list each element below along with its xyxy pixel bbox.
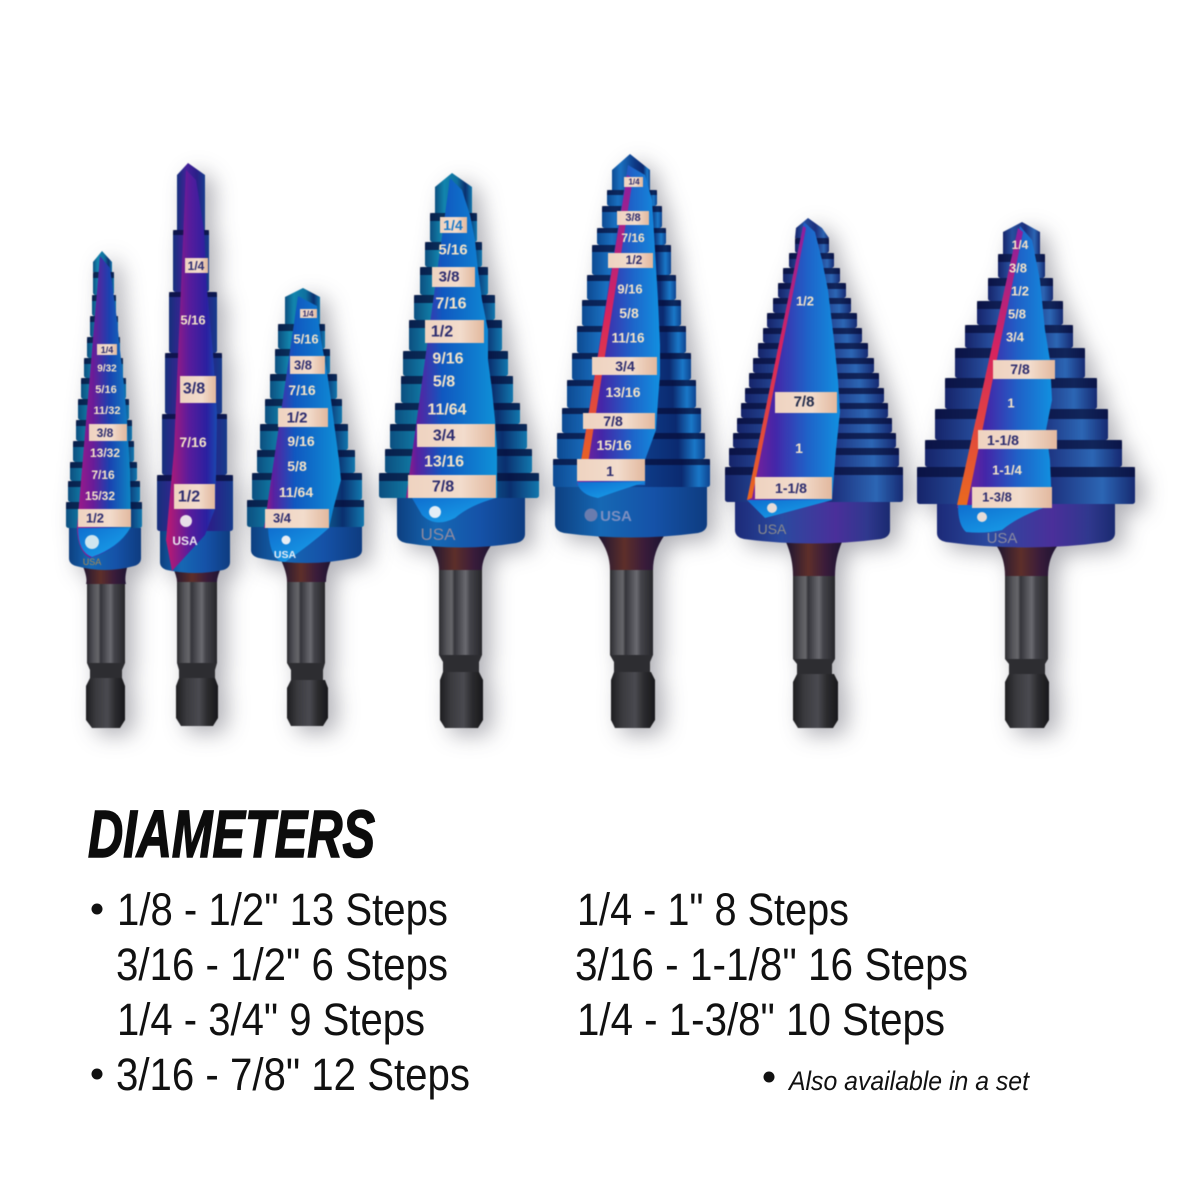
bullet (764, 1072, 774, 1082)
size markings (265, 309, 329, 561)
size markings: 7/16 (621, 231, 645, 245)
flute (406, 178, 497, 522)
size markings (408, 217, 496, 544)
size markings (577, 177, 657, 525)
bullet (92, 904, 102, 914)
size markings: 11/64 (279, 484, 313, 500)
diameters list: left column (92, 884, 470, 1100)
shank (598, 536, 664, 728)
shank (82, 564, 128, 728)
size markings: 3/8 (439, 268, 459, 286)
size markings: 3/4 (615, 358, 635, 374)
drill bit 2: 3/16 - 1/2 inch (157, 163, 233, 726)
shank (280, 558, 332, 726)
size markings: 1/2 (287, 410, 307, 426)
size markings: 1-3/8 (982, 490, 1012, 504)
size markings (972, 238, 1057, 547)
size markings: 7/16 (288, 382, 316, 398)
size markings: USA (274, 549, 297, 561)
size markings (78, 344, 131, 567)
size markings: 5/8 (1008, 306, 1026, 322)
line 6: 3/16 - 1-1/8" 16 Steps (575, 939, 968, 990)
shank (172, 566, 222, 726)
size markings: 9/16 (287, 433, 315, 449)
size markings: 9/32 (97, 364, 117, 374)
size markings: 9/16 (432, 350, 464, 368)
size markings: USA (83, 557, 101, 567)
size markings: 1/2 (1011, 284, 1029, 298)
size markings: USA (421, 525, 456, 544)
size markings: 5/16 (293, 332, 319, 346)
size markings: 3/8 (294, 358, 312, 372)
line 4: 3/16 - 7/8" 12 Steps (116, 1049, 470, 1100)
flute (264, 296, 341, 562)
size markings: 7/16 (435, 296, 467, 312)
size markings: USA (600, 508, 632, 525)
size markings: 1/2 (626, 253, 643, 267)
size markings: 3/8 (625, 212, 641, 224)
size markings: 7/8 (603, 413, 623, 429)
size markings: 7/8 (794, 394, 814, 410)
flute (747, 222, 840, 518)
line 2: 3/16 - 1/2" 6 Steps (116, 939, 448, 990)
size markings: USA (987, 530, 1017, 547)
line 3: 1/4 - 3/4" 9 Steps (117, 994, 425, 1045)
flute (166, 170, 217, 571)
size markings: 9/16 (617, 282, 643, 296)
note text: Also available in a set (787, 1066, 1030, 1096)
size markings: 3/4 (1006, 330, 1025, 344)
size markings: 13/16 (605, 384, 641, 400)
size markings: 5/8 (433, 374, 455, 390)
stepped body (157, 163, 233, 573)
line 1: 1/8 - 1/2" 13 Steps (117, 884, 448, 935)
size markings: 3/8 (1009, 260, 1027, 276)
set availability note (764, 1066, 1030, 1096)
size markings: 1/4 (302, 310, 314, 318)
stepped body (247, 288, 364, 563)
size markings: 11/32 (94, 405, 120, 417)
size markings: 3/4 (433, 428, 455, 444)
size markings: 1/2 (178, 488, 200, 506)
size markings: 5/16 (95, 384, 117, 396)
shank (996, 545, 1058, 728)
stepped body (379, 173, 539, 548)
line 5: 1/4 - 1" 8 Steps (577, 884, 849, 935)
size markings: 1/4 (1012, 238, 1029, 252)
stepped body (553, 154, 710, 538)
size markings: 7/8 (432, 478, 454, 496)
flute (77, 256, 131, 558)
drill bit 5: 1/4 - 1 inch (553, 154, 710, 728)
size markings: 1/2 (796, 294, 814, 308)
size markings: 3/8 (97, 426, 114, 440)
drill bit 1: 1/8 - 1/2 inch (66, 251, 142, 728)
heading: DIAMETERS: DIAMETERS (88, 797, 375, 872)
size markings: 5/8 (287, 458, 307, 474)
drill bit 4: 3/16 - 7/8 inch (379, 173, 539, 728)
size markings: 1/2 (431, 324, 453, 340)
size markings: 5/8 (619, 305, 639, 321)
size markings: 3/8 (183, 380, 205, 398)
size markings: USA (758, 521, 787, 537)
size markings (755, 294, 837, 537)
size markings: USA (172, 534, 198, 548)
size markings: 13/32 (90, 446, 120, 460)
flute (577, 165, 660, 498)
size markings: 7/16 (91, 468, 115, 482)
size markings: 1/4 (443, 217, 463, 233)
size markings: 15/16 (596, 437, 632, 453)
size markings: 1/2 (86, 510, 104, 526)
bullet (92, 1068, 102, 1080)
shank (786, 542, 842, 728)
size markings (172, 258, 216, 548)
size markings: 1/4 (628, 178, 640, 186)
size markings: 15/32 (85, 489, 115, 503)
size markings: 1 (795, 440, 803, 456)
size markings: 1-1/4 (992, 462, 1023, 478)
stepped body (66, 251, 142, 570)
size markings: 3/4 (273, 510, 292, 526)
size markings: 13/16 (424, 454, 464, 470)
size markings: 5/16 (438, 242, 468, 258)
size markings: 1 (1007, 396, 1015, 410)
stepped body (725, 218, 903, 544)
flute (957, 226, 1052, 533)
size markings: 1 (606, 463, 614, 479)
size markings: 1/4 (188, 259, 205, 273)
size markings: 1-1/8 (775, 480, 807, 496)
drill bit 7: 1/4 - 1-3/8 inch (917, 222, 1135, 728)
line 7: 1/4 - 1-3/8" 10 Steps (577, 994, 945, 1045)
size markings: 7/8 (1010, 361, 1030, 377)
size markings: 5/16 (180, 312, 206, 328)
size markings: 1-1/8 (987, 432, 1019, 448)
stepped body (917, 222, 1135, 548)
drill bit 3: 1/4 - 3/4 inch (247, 288, 364, 726)
drill bit 6: 3/16 - 1-1/8 inch (725, 218, 903, 728)
shank (430, 544, 492, 728)
size markings: 7/16 (179, 434, 207, 450)
size markings: 11/64 (427, 402, 467, 418)
diameters list: right column (575, 884, 968, 1045)
size markings: 11/16 (611, 330, 645, 346)
size markings: 1/4 (101, 345, 113, 355)
